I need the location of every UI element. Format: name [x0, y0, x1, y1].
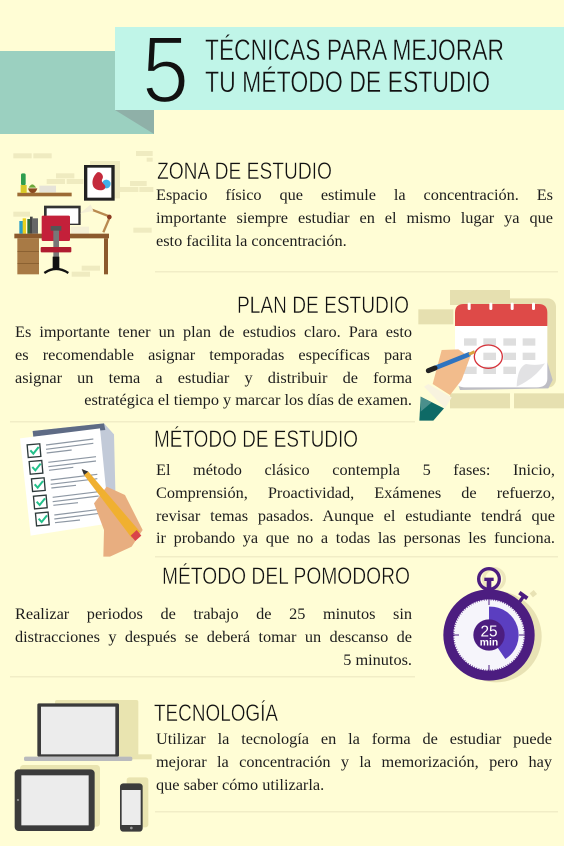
title: TU MÉTODO DE ESTUDIO — [205, 66, 490, 99]
text: tecnología: que saber cómo utilizarla. — [156, 775, 324, 794]
text: método de estudio: El método clásico contempla 5 fases: Inicio, — [156, 460, 555, 479]
text: zona de estudio — [156, 185, 553, 250]
big number 5: 5 — [142, 17, 189, 123]
text: método de estudio: revisar temas pasados. Aunque el estudiante tendrá que — [156, 506, 555, 525]
text: plan de estudio — [15, 322, 412, 409]
dividers — [10, 271, 558, 812]
text: método del pomodoro: Realizar periodos de trabajo de 25 minutos sin — [15, 604, 412, 623]
text: método del pomodoro — [15, 604, 412, 669]
text: plan de estudio: es recomendable asignar temporadas específicas para — [15, 345, 412, 364]
heading: zona de estudio: ZONA DE ESTUDIO — [157, 158, 332, 185]
text: plan de estudio: asignar un tema a estudiar y distribuir de forma — [15, 368, 412, 387]
text: zona de estudio: esto facilita la concentración. — [156, 231, 347, 250]
text: método de estudio — [156, 460, 555, 547]
icon: calendar and hand — [418, 290, 564, 421]
text: zona de estudio: Espacio físico que estimule la concentración. Es — [156, 185, 553, 204]
heading: plan de estudio: PLAN DE ESTUDIO — [237, 292, 409, 319]
heading: tecnología: TECNOLOGÍA — [154, 700, 278, 727]
text: tecnología — [156, 729, 552, 794]
text: método de estudio: ir probando ya que no a todas las personas les funciona. — [156, 528, 555, 547]
text: método del pomodoro: 5 minutos. — [343, 650, 412, 669]
text: zona de estudio: importante siempre estudiar en el mismo lugar ya que — [156, 208, 553, 227]
icon: stopwatch 25 min: 25 — [480, 623, 498, 640]
icon: study desk — [13, 151, 153, 277]
icon: stopwatch 25 min: min — [480, 637, 498, 648]
title — [205, 34, 504, 99]
text: plan de estudio: Es importante tener un plan de estudios claro. Para esto — [15, 322, 412, 341]
icon: laptop, tablet and phone — [15, 700, 152, 832]
icon: checklist and pencil — [20, 423, 143, 557]
icon: stopwatch 25 min — [443, 569, 542, 682]
text: tecnología: Utilizar la tecnología en la forma de estudiar puede — [156, 729, 552, 748]
text: método de estudio: Comprensión, Proactividad, Exámenes de refuerzo, — [156, 483, 555, 502]
text: tecnología: mejorar la concentración y la memorización, pero hay — [156, 752, 552, 771]
text: plan de estudio: estratégica el tiempo y marcar los días de examen. — [84, 390, 412, 409]
heading: método de estudio: MÉTODO DE ESTUDIO — [154, 426, 358, 453]
heading: método del pomodoro: MÉTODO DEL POMODORO — [162, 563, 410, 590]
header ribbon — [0, 27, 564, 134]
text: método del pomodoro: distracciones y después se deberá tomar un descanso de — [15, 627, 412, 646]
